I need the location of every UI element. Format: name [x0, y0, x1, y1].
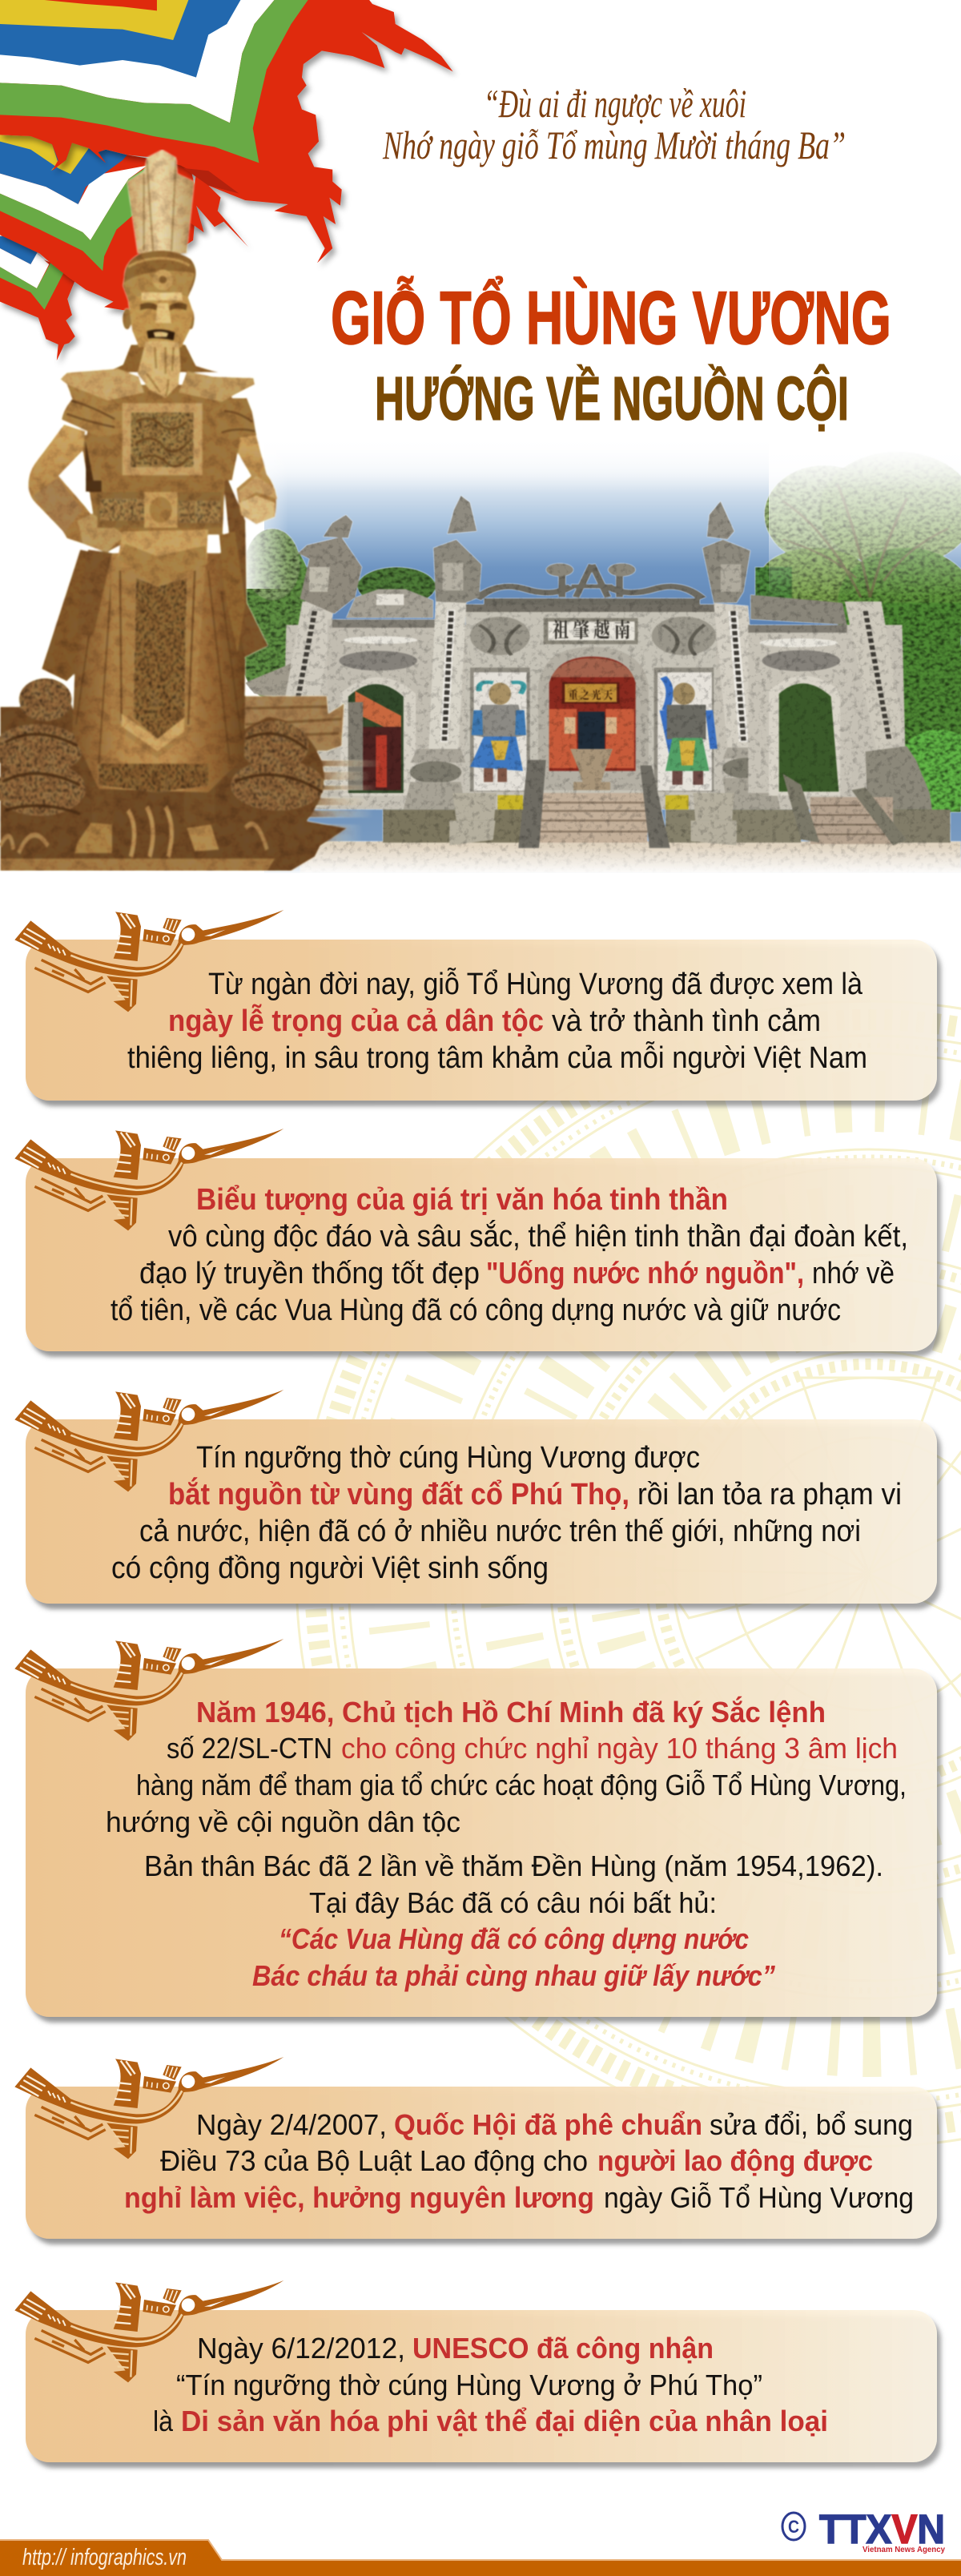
turban — [123, 251, 196, 300]
arm left — [28, 424, 126, 553]
ground — [300, 841, 961, 873]
panel: card 2: vô cùng độc đáo và sâu sắc, thể hiện tinh thần đại đoàn kết, — [168, 1219, 908, 1254]
panel: card 3: rồi lan tỏa ra phạm vi — [637, 1478, 902, 1511]
flowers — [497, 795, 523, 810]
panel: card 2 — [14, 1129, 937, 1351]
hem — [99, 764, 208, 792]
statue of King Hung — [0, 150, 382, 871]
panel: card 1: và trở thành tình cảm — [552, 1004, 821, 1038]
panel: card 3: Tín ngưỡng thờ cúng Hùng Vương được — [196, 1441, 700, 1475]
trees behind temple — [233, 451, 961, 812]
quote — [382, 81, 846, 167]
neck — [106, 344, 219, 372]
panel: card 3: có cộng đồng người Việt sinh sống — [111, 1552, 549, 1585]
panel: card 3: cả nước, hiện đã có ở nhiều nước trên thế giới, những nơi — [139, 1515, 861, 1548]
panel: card 3: bắt nguồn từ vùng đất cổ Phú Thọ, — [168, 1476, 629, 1511]
panel: card 6: UNESCO đã công nhận — [412, 2332, 714, 2365]
footer bar — [0, 2540, 961, 2576]
right arch — [769, 676, 840, 795]
title — [331, 276, 891, 433]
panel: card 4: “Các Vua Hùng đã có công dựng nước — [279, 1922, 749, 1955]
logo: TTXVN: Vietnam News Agency — [862, 2545, 945, 2554]
panel: card 2: tổ tiên, về các Vua Hùng đã có công dựng nước và giữ nước — [111, 1294, 841, 1327]
panel: card 1: Từ ngàn đời nay, giỗ Tổ Hùng Vương đã được xem là — [208, 967, 863, 1001]
left guardian panel — [470, 667, 530, 791]
panel: card 2: đạo lý truyền thống tốt đẹp — [139, 1257, 480, 1290]
center wall — [465, 604, 716, 791]
panel: card 5: Quốc Hội đã phê chuẩn — [394, 2108, 702, 2141]
stone planters — [449, 793, 737, 845]
pauldrons — [60, 368, 144, 400]
flag: middle banner — [0, 135, 203, 311]
panel: card 6: Di sản văn hóa phi vật thể đại diện của nhân loại — [181, 2405, 828, 2437]
sash — [118, 529, 208, 587]
right wall section — [748, 625, 851, 793]
panel: card 1: ngày lễ trọng của cả dân tộc — [168, 1003, 544, 1038]
footer bar: http:// infographics.vn — [22, 2545, 187, 2570]
photo fades — [240, 437, 961, 889]
gold plaque — [565, 684, 617, 702]
panel: card 4: Tại đây Bác đã có câu nói bất hủ: — [309, 1886, 717, 1919]
panel: card 4: hướng về cội nguồn dân tộc — [106, 1805, 460, 1838]
dragon crest — [477, 564, 702, 602]
low side roof — [245, 663, 291, 702]
panel: card 5: Điều 73 của Bộ Luật Lao động cho — [160, 2144, 588, 2177]
arm right — [230, 435, 276, 524]
torso — [80, 435, 227, 535]
panel: card 4: Bản thân Bác đã 2 lần về thăm Đền Hùng (năm 1954,1962). — [144, 1849, 883, 1882]
right guardian panel — [654, 667, 714, 791]
background bronze drum pattern — [296, 1001, 961, 2147]
right stairs — [782, 774, 907, 845]
panel: card 5: ngày Giỗ Tổ Hùng Vương — [604, 2181, 914, 2214]
flag: small third banner — [0, 235, 75, 360]
panel: card 5 — [14, 2057, 937, 2239]
flag: main banner — [0, 0, 453, 263]
panel: card 4: số 22/SL-CTN — [167, 1732, 332, 1765]
chest — [86, 384, 240, 481]
panel: card 4 — [14, 1639, 937, 2017]
panel: card 4: cho công chức nghỉ ngày 10 tháng 3 âm lịch — [341, 1732, 898, 1765]
panel: card 6: là — [153, 2405, 174, 2437]
motion blur streaks — [294, 760, 382, 843]
panel: card 5: người lao động được — [597, 2144, 873, 2177]
base slab — [0, 859, 275, 871]
cape — [42, 549, 112, 682]
outer right pillar — [845, 602, 932, 810]
sleeves — [62, 384, 124, 437]
statue upper body and head — [60, 150, 257, 481]
quote: “Đù ai đi ngược về xuôi — [484, 81, 746, 126]
inner right pillar — [702, 501, 780, 810]
panel: card 5: sửa đổi, bổ sung — [710, 2108, 913, 2141]
panel: card 1 — [14, 910, 937, 1101]
belt — [98, 492, 222, 528]
panel: card 4: Bác cháu ta phải cùng nhau giữ lấy nước” — [252, 1959, 775, 1992]
panel: card 6 — [14, 2280, 937, 2462]
statue body — [0, 424, 382, 871]
outer left pillar — [284, 515, 362, 705]
central arch — [538, 647, 649, 791]
panel: card 1: thiêng liêng, in sâu trong tâm khảm của mỗi người Việt Nam — [127, 1040, 867, 1075]
robe — [72, 553, 246, 792]
left wall section — [328, 619, 438, 795]
panel: card 5: nghỉ làm việc, hưởng nguyên lương — [124, 2181, 594, 2214]
panel: card 4: Năm 1946, Chủ tịch Hồ Chí Minh đã ký Sắc lệnh — [196, 1695, 826, 1729]
face — [123, 308, 132, 330]
inner left pillar — [404, 495, 481, 810]
panel: card 6: Ngày 6/12/2012, — [197, 2332, 405, 2365]
panel: card 2: "Uống nước nhớ nguồn", — [486, 1257, 804, 1290]
gold plaque: 重 之 光 天 — [569, 688, 613, 702]
logo: TTXVN: C — [788, 2517, 799, 2537]
incense burner — [570, 749, 613, 791]
panel: card 2: Biểu tượng của giá trị văn hóa tinh thần — [196, 1183, 728, 1217]
temple backing — [282, 625, 907, 810]
panel: card 3 — [14, 1390, 937, 1604]
chest plate — [123, 403, 203, 475]
logo: TTXVN: TTXVN — [819, 2506, 945, 2552]
boots — [92, 785, 114, 827]
sky behind temple — [264, 437, 961, 873]
top plaque: 祖 肇 越 南 — [553, 614, 630, 643]
carved dragons on wall — [470, 617, 716, 655]
wave base — [0, 679, 347, 871]
platforms — [383, 810, 530, 843]
plume — [127, 150, 195, 254]
panel: card 6: “Tín ngưỡng thờ cúng Hùng Vương ở Phú Thọ” — [176, 2369, 762, 2401]
panel: card 5: Ngày 2/4/2007, — [196, 2108, 387, 2141]
beard — [138, 340, 181, 398]
apron — [111, 567, 206, 759]
main stairs — [518, 760, 670, 848]
header temple photograph — [233, 451, 961, 873]
left arch — [340, 678, 416, 795]
panel: card 2: nhớ về — [812, 1257, 895, 1290]
